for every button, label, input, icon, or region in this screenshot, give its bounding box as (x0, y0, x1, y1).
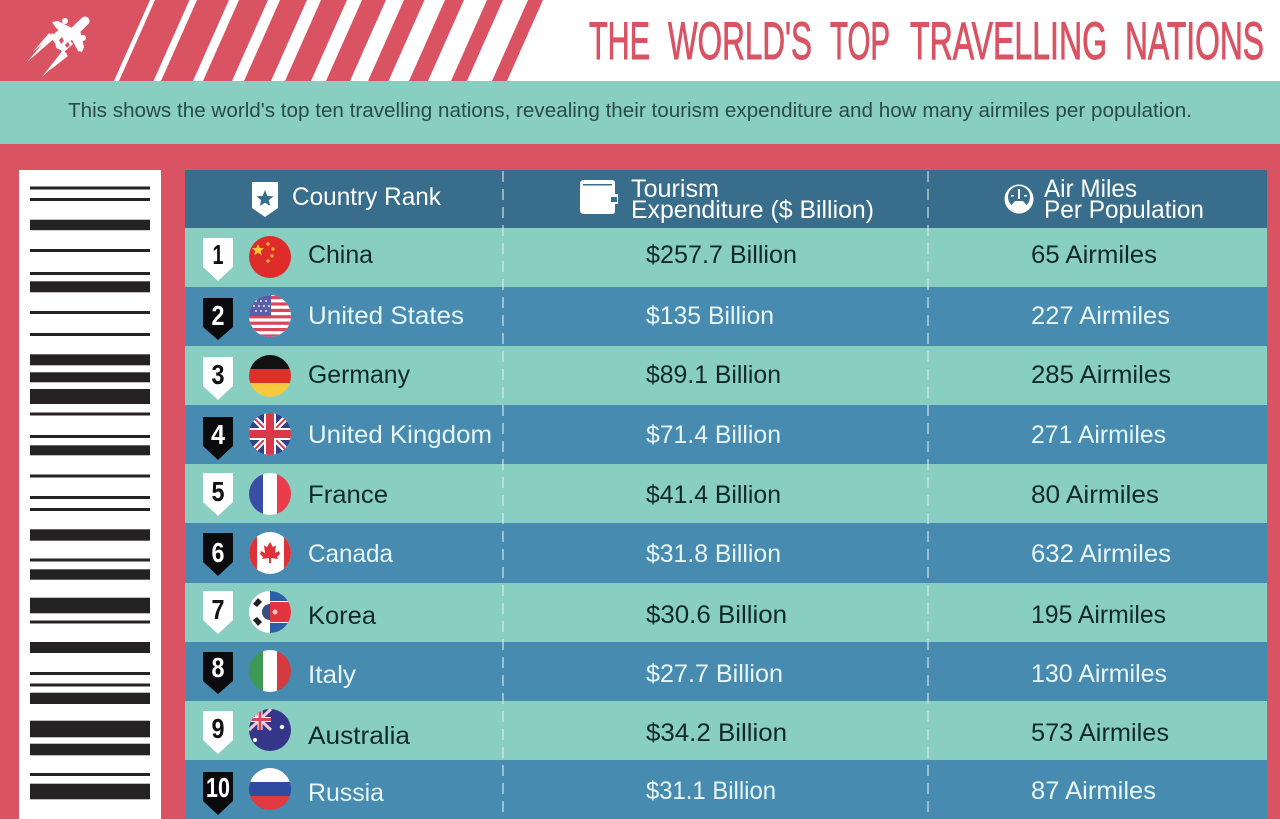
icon: wallet (580, 180, 618, 214)
air miles value: 227 Airmiles (1031, 302, 1170, 330)
rank badge 2: 2 (212, 300, 224, 331)
row 3: Germany (203, 355, 1171, 400)
heading: tourism expenditure: Expenditure ($ Billion) (631, 196, 874, 224)
rank badge 1 (203, 238, 233, 281)
air miles value: 87 Airmiles (1031, 777, 1156, 805)
subtitle text: This shows the world's top ten travelling nations, revealing their tourism expenditure and how many airmiles per population. (68, 100, 1192, 122)
flag: Australia (249, 709, 291, 751)
rank badge 4 (203, 417, 233, 460)
expenditure value: $30.6 Billion (646, 601, 787, 629)
rank badge 6: 6 (212, 537, 224, 568)
heading: country rank: Country Rank (292, 183, 441, 211)
flag: Germany (249, 355, 291, 397)
country name: Australia (308, 722, 410, 750)
expenditure value: $41.4 Billion (646, 481, 781, 509)
rank badge 8 (203, 652, 233, 694)
header banner with diagonal stripes (0, 0, 543, 81)
panel: barcode strip (19, 170, 161, 819)
expenditure value: $135 Billion (646, 302, 774, 330)
air miles value: 271 Airmiles (1031, 421, 1166, 449)
table row stripes (185, 228, 1267, 819)
title (589, 12, 1264, 71)
heading: air miles: Air Miles (1044, 175, 1137, 203)
rank badge 5 (203, 473, 233, 516)
expenditure value: $89.1 Billion (646, 361, 781, 389)
rank badge 8: 8 (212, 652, 224, 683)
country name: Russia (308, 779, 384, 807)
rank badge 3: 3 (212, 359, 224, 390)
rank badge 10 (203, 772, 233, 815)
country name: China (308, 241, 373, 269)
flag: United Kingdom (249, 413, 291, 455)
flag: China (249, 236, 291, 278)
rank badge 7: 7 (212, 594, 224, 625)
flag: France (249, 473, 291, 515)
row 8: Italy (203, 650, 1167, 694)
table header row (185, 170, 1267, 228)
heading: tourism expenditure (631, 175, 874, 224)
rank badge 10: 10 (206, 772, 230, 803)
expenditure value: $31.1 Billion (646, 777, 776, 805)
rank badge 4: 4 (211, 419, 225, 450)
heading: air miles (1044, 175, 1204, 224)
row 6: Canada (203, 532, 1171, 576)
flag: United States (249, 295, 291, 338)
expenditure value: $71.4 Billion (646, 421, 781, 449)
rank badge 3 (203, 357, 233, 400)
row 2: United States (203, 295, 1170, 340)
rank badge 9 (203, 711, 233, 754)
rank badge 2 (203, 298, 233, 340)
country name: France (308, 481, 388, 509)
country name: Canada (308, 540, 393, 568)
title: TOP (830, 12, 890, 71)
icon: gauge (1004, 184, 1034, 214)
row 1: China (203, 236, 1157, 281)
heading: air miles: Per Population (1044, 196, 1204, 224)
flag: Canada (249, 532, 291, 574)
flag: Russia (249, 768, 291, 810)
air miles value: 195 Airmiles (1031, 601, 1166, 629)
air miles value: 573 Airmiles (1031, 719, 1169, 747)
air miles value: 285 Airmiles (1031, 361, 1171, 389)
air miles value: 80 Airmiles (1031, 481, 1159, 509)
row 9: Australia (203, 709, 1169, 754)
rank badge 7 (203, 591, 233, 634)
expenditure value: $34.2 Billion (646, 719, 787, 747)
rank badge 1: 1 (212, 239, 224, 270)
title: THE (589, 12, 650, 71)
row 7: Korea (203, 591, 1166, 634)
row 4: United Kingdom (203, 413, 1166, 460)
country name: Korea (308, 602, 376, 630)
row 5: France (203, 473, 1159, 516)
rank badge 6 (203, 533, 233, 576)
air miles value: 632 Airmiles (1031, 540, 1171, 568)
rank badge 5: 5 (212, 476, 224, 507)
country name: United Kingdom (308, 421, 492, 449)
subtitle band (0, 81, 1280, 144)
title: TRAVELLING (910, 12, 1107, 71)
country name: Germany (308, 361, 410, 389)
expenditure value: $31.8 Billion (646, 540, 781, 568)
air miles value: 65 Airmiles (1031, 241, 1157, 269)
flag: Korea (249, 591, 291, 633)
icon: airplane (27, 18, 86, 77)
expenditure value: $257.7 Billion (646, 241, 797, 269)
expenditure value: $27.7 Billion (646, 660, 783, 688)
country name: United States (308, 302, 464, 330)
rank badge 9: 9 (212, 713, 224, 744)
icon: star badge (252, 182, 278, 217)
row 10: Russia (203, 768, 1156, 815)
flag: Italy (249, 650, 291, 692)
country name: Italy (308, 661, 357, 689)
heading: tourism expenditure: Tourism (631, 175, 719, 203)
title: WORLD'S (668, 12, 812, 71)
air miles value: 130 Airmiles (1031, 660, 1167, 688)
